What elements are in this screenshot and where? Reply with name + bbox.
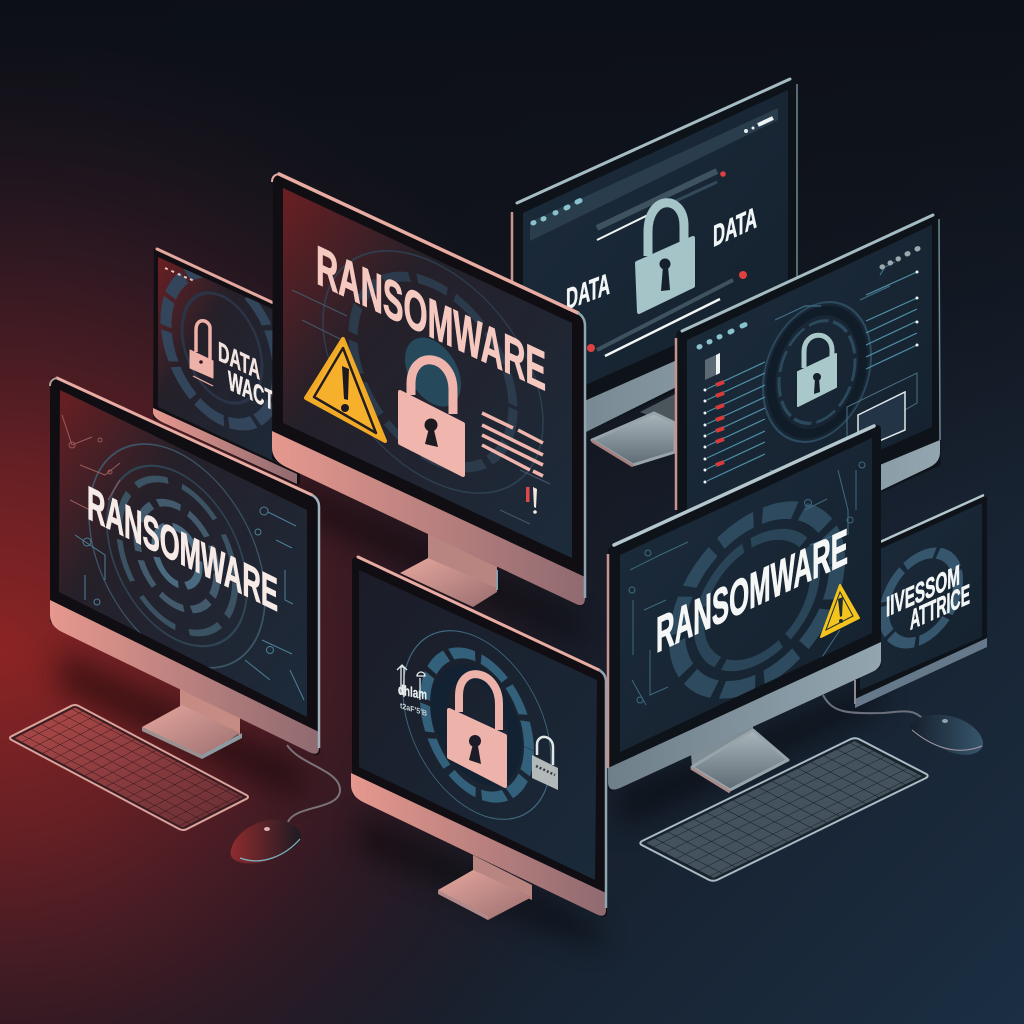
status lines — [597, 171, 733, 356]
log lines right — [866, 272, 917, 369]
stand — [592, 394, 675, 466]
padlock — [400, 360, 463, 475]
circuit lines reddish — [62, 415, 120, 510]
cable: right mouse — [823, 695, 922, 718]
text: WACT: WACT — [228, 365, 274, 417]
padlock — [798, 335, 836, 406]
square icon — [705, 353, 720, 380]
padlock — [637, 203, 693, 312]
monitor: small right, attack text — [855, 495, 987, 708]
text: RANSOMWARE: RANSOMWARE — [87, 475, 278, 622]
monitor: top right, data lock — [512, 79, 797, 466]
ring graphic — [677, 481, 837, 719]
text: RANSOMWARE: RANSOMWARE — [656, 518, 848, 664]
keyboard: right — [638, 737, 930, 882]
ring graphic — [322, 250, 544, 494]
circuit lines — [629, 462, 865, 705]
small padlock — [532, 737, 558, 790]
monitor: right mid, code lock — [674, 214, 941, 514]
text: small label: dhlam — [398, 681, 427, 703]
text: RANSOMWARE: RANSOMWARE — [316, 235, 546, 403]
header bar — [530, 108, 778, 241]
monitor: small left, data lock — [153, 249, 300, 484]
padlock — [190, 321, 213, 386]
monitor: center top, ransomware — [272, 174, 585, 607]
text: DATA right: DATA — [713, 199, 757, 254]
stand — [400, 530, 497, 607]
circuit lines — [292, 290, 550, 524]
text: DATA left: DATA — [566, 266, 610, 317]
mouse: left — [231, 820, 301, 863]
header dots — [165, 268, 196, 282]
cable: left mouse — [287, 745, 340, 822]
monitor: left front, ransomware — [50, 378, 319, 759]
ransom note lines — [482, 413, 543, 476]
circuit lines — [75, 507, 304, 700]
small icons — [397, 665, 425, 700]
stand — [438, 855, 532, 920]
ring graphic — [884, 540, 958, 656]
window box — [847, 373, 917, 450]
floor shadows — [60, 480, 880, 950]
header dots — [533, 201, 580, 223]
ring graphic — [88, 443, 266, 669]
monitor: right front, ransomware — [608, 426, 881, 792]
text: small code: t2aF'5'B — [400, 701, 427, 718]
warning triangle — [821, 585, 859, 637]
ring graphic — [160, 269, 272, 430]
ring graphic — [403, 603, 551, 847]
keyboard: left — [8, 704, 250, 831]
circuit traces — [770, 262, 895, 480]
padlock — [449, 674, 505, 786]
small alert marks — [526, 487, 537, 514]
ring graphic — [762, 301, 872, 443]
mouse: right — [910, 715, 983, 755]
log lines left — [707, 362, 765, 481]
stand — [690, 712, 788, 792]
text: DATA: DATA — [218, 336, 260, 386]
header dots — [699, 325, 745, 347]
warning triangle — [306, 339, 385, 441]
text: IIVESSOM: IIVESSOM — [886, 559, 960, 624]
stand — [142, 680, 242, 759]
monitor: bottom center, lock — [351, 557, 606, 920]
